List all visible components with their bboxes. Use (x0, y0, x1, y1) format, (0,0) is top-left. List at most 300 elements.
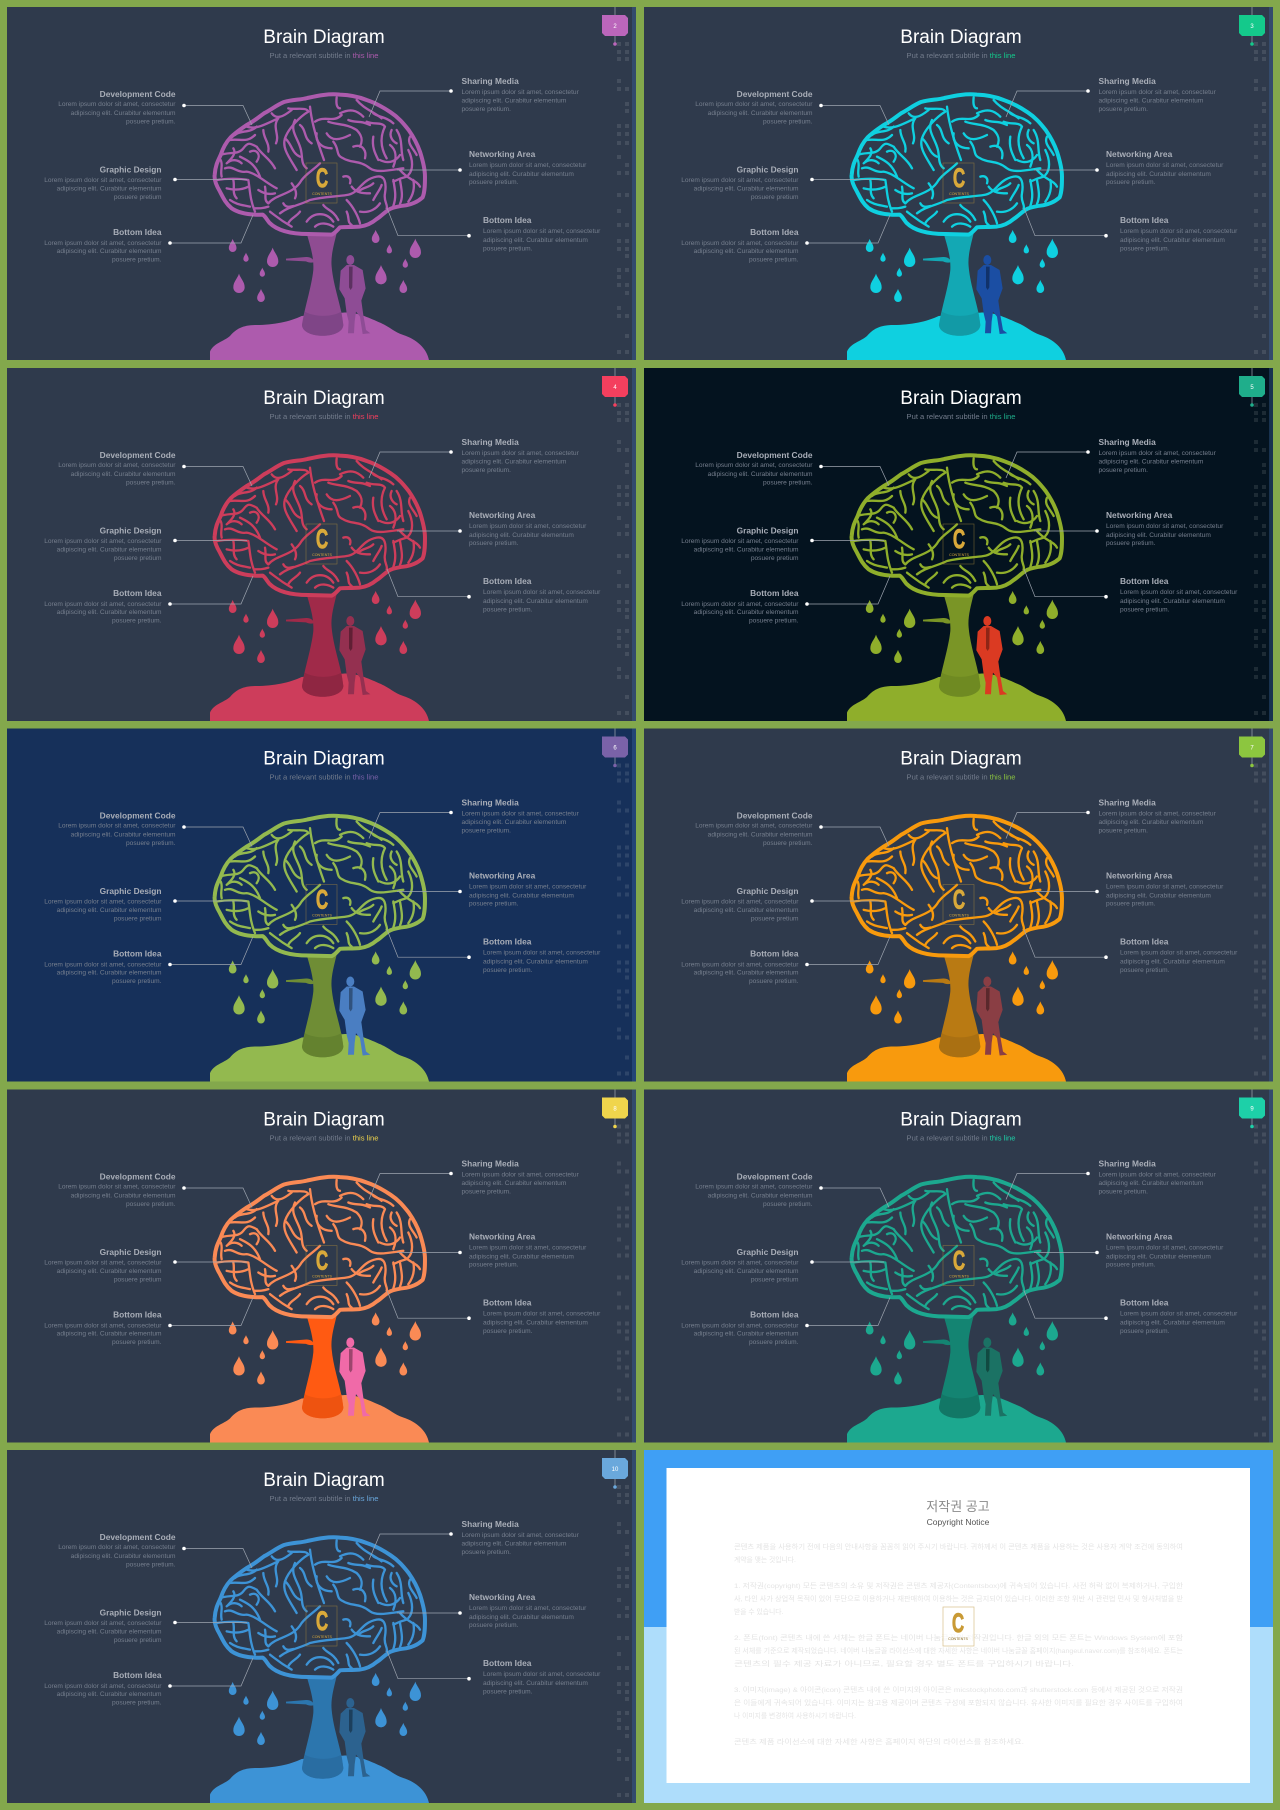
label: Graphic Design: posuere pretium (751, 194, 799, 201)
label: Sharing Media: posuere pretium. (1098, 106, 1148, 113)
label: Bottom Idea left (681, 1310, 799, 1346)
label: Development Code (58, 1172, 176, 1208)
label: Bottom Idea left: Lorem ipsum dolor sit amet, consectetur (44, 962, 162, 968)
panel: slide 4 red (7, 368, 636, 721)
label: Bottom Idea right (483, 936, 601, 974)
label: Bottom Idea right (1120, 576, 1238, 614)
label: Graphic Design: Lorem ipsum dolor sit amet, consectetur (44, 538, 162, 545)
label: Bottom Idea right: Lorem ipsum dolor sit amet, consectetur (1120, 589, 1238, 596)
label: Bottom Idea right: Lorem ipsum dolor sit amet, consectetur (483, 1310, 601, 1318)
panel: slide 3 cyan (644, 7, 1273, 360)
label: Bottom Idea right: Lorem ipsum dolor sit amet, consectetur (483, 589, 601, 596)
label: Sharing Media: Sharing Media (1098, 1158, 1156, 1168)
subtitle: Put a relevant subtitle in this line (907, 51, 1015, 60)
label: Bottom Idea left: posuere pretium. (112, 978, 162, 985)
label: Graphic Design: adipiscing elit. Curabitur elementum (694, 907, 799, 914)
label: Bottom Idea right (1120, 215, 1238, 253)
title: Brain Diagram (900, 748, 1022, 770)
page tag (602, 1450, 628, 1489)
label: Development Code: Development Code (737, 89, 813, 99)
label: Bottom Idea right: adipiscing elit. Curabitur elementum (1120, 598, 1225, 605)
label: Bottom Idea right: Lorem ipsum dolor sit amet, consectetur (1120, 228, 1238, 235)
label: Sharing Media (462, 1158, 580, 1196)
label: Sharing Media (1098, 1158, 1217, 1196)
label: Bottom Idea right (483, 1298, 601, 1335)
label: Networking Area: adipiscing elit. Curabitur elementum (469, 532, 574, 539)
label: Development Code: adipiscing elit. Curabitur elementum (71, 471, 176, 478)
label: Bottom Idea left (44, 948, 162, 985)
label: Networking Area: adipiscing elit. Curabitur elementum (469, 1254, 574, 1260)
label: Bottom Idea left: adipiscing elit. Curabitur elementum (57, 1330, 162, 1338)
label: Development Code: adipiscing elit. Curabitur elementum (71, 832, 176, 838)
label: Bottom Idea right: adipiscing elit. Curabitur elementum (483, 1680, 588, 1687)
logo: C (953, 163, 965, 193)
label: Bottom Idea left: Bottom Idea (750, 948, 799, 958)
notice body text: 3. 이미지(image) & 아이콘(icon) 콘텐츠 내에 쓴 이미지와 아이콘은 micstockphoto.com과 shutterstock.com 등에서 제공된 것으로 저작권 (734, 1685, 1183, 1694)
label: Development Code: Lorem ipsum dolor sit amet, consectetur (58, 822, 176, 830)
notice body text: 계약을 맺는 것입니다. (734, 1555, 796, 1564)
logo: C (316, 524, 328, 554)
label: Networking Area: Lorem ipsum dolor sit amet, consectetur (469, 1605, 587, 1612)
logo: C (953, 884, 965, 915)
page tag: 5 (1250, 385, 1254, 391)
label: Graphic Design: posuere pretium (114, 1637, 162, 1644)
label: Graphic Design (44, 1247, 162, 1284)
label: Networking Area: Networking Area (469, 1592, 536, 1602)
notice body text: 된 서체를 기준으로 제작되었습니다. 네이버 나눔글꼴 라이선스에 대한 자세한 사항은 네이버 나눔글꼴 홈페이지(hangeul.naver.com)를 참조하세요. 폰트는 (734, 1646, 1183, 1655)
label: Development Code: Development Code (737, 810, 813, 820)
page tag (602, 7, 628, 46)
title: Brain Diagram (900, 27, 1022, 48)
page tag (602, 368, 628, 407)
label: Bottom Idea right: Lorem ipsum dolor sit amet, consectetur (483, 228, 601, 235)
label: Graphic Design: adipiscing elit. Curabitur elementum (57, 547, 162, 554)
notice body text: 콘텐츠 제품 라이선스에 대한 자세한 사항은 홈페이지 하단의 라이선스를 참조하세요. (734, 1737, 1024, 1746)
label: Networking Area (1106, 510, 1224, 547)
label: Graphic Design (681, 886, 799, 922)
logo (306, 1606, 337, 1646)
label: Development Code: Lorem ipsum dolor sit amet, consectetur (58, 462, 176, 469)
label: Bottom Idea left: Bottom Idea (750, 588, 799, 598)
title: Brain Diagram (263, 1470, 385, 1491)
label: Development Code: adipiscing elit. Curabitur elementum (71, 1192, 176, 1200)
logo: C (316, 884, 328, 915)
connector lines (805, 450, 1108, 606)
label: Bottom Idea left: Bottom Idea (113, 588, 162, 598)
label: Graphic Design: Graphic Design (100, 886, 162, 896)
label: Bottom Idea right (483, 215, 601, 253)
label: Networking Area: posuere pretium. (469, 1622, 519, 1629)
title: Brain Diagram (900, 388, 1022, 409)
page tag: 3 (1250, 24, 1254, 30)
panel: slide 10 blue (7, 1450, 636, 1803)
panel: slide 7 orange (644, 728, 1273, 1082)
subtitle: Put a relevant subtitle in this line (270, 1494, 378, 1503)
panel: slide 8 coral (7, 1090, 636, 1442)
label: Sharing Media (1098, 76, 1217, 113)
label: Networking Area: posuere pretium. (469, 540, 519, 547)
label: Development Code: Development Code (100, 89, 176, 99)
label: Graphic Design (44, 165, 162, 201)
subtitle: Put a relevant subtitle in this line (907, 1134, 1015, 1142)
label: Networking Area: posuere pretium. (1106, 179, 1156, 186)
label: Development Code: posuere pretium. (763, 118, 813, 126)
logo: CONTENTS (312, 1635, 332, 1639)
label: Networking Area: Networking Area (469, 870, 536, 880)
label: Graphic Design (44, 526, 162, 562)
logo: C (316, 1606, 328, 1636)
page tag: 2 (613, 24, 617, 30)
label: Graphic Design: adipiscing elit. Curabitur elementum (694, 186, 799, 193)
page tag: 10 (612, 1467, 619, 1473)
label: Sharing Media (462, 76, 580, 113)
notice body text: 콘텐츠 제품을 사용하기 전에 다음의 안내사항을 꼼꼼히 읽어 주시기 바랍니다. 귀하께서 이 콘텐츠 제품을 사용하는 것은 사용자 계약 조건에 동의하여 (734, 1542, 1183, 1551)
label: Development Code (695, 1172, 813, 1208)
label: Bottom Idea left (44, 1310, 162, 1346)
label: Development Code: Development Code (737, 1172, 813, 1182)
title: Brain Diagram (900, 1110, 1022, 1130)
label: Bottom Idea left: adipiscing elit. Curabitur elementum (57, 248, 162, 255)
subtitle: Put a relevant subtitle in this line (270, 51, 378, 60)
label: Bottom Idea right: posuere pretium. (1120, 246, 1170, 253)
label: Networking Area: Networking Area (469, 510, 536, 520)
connector lines (168, 1172, 471, 1327)
label: Sharing Media (1098, 798, 1217, 834)
label: Development Code: posuere pretium. (126, 840, 176, 847)
label: Networking Area: adipiscing elit. Curabitur elementum (1106, 171, 1211, 178)
label: Sharing Media: Lorem ipsum dolor sit amet, consectetur (1098, 810, 1217, 818)
label: Bottom Idea left: Lorem ipsum dolor sit amet, consectetur (681, 601, 799, 608)
label: Bottom Idea right: Bottom Idea (483, 936, 532, 946)
label: Networking Area: Networking Area (1106, 1232, 1173, 1242)
label: Graphic Design: adipiscing elit. Curabitur elementum (57, 186, 162, 193)
connector lines (168, 811, 471, 966)
panel: copyright notice (644, 1450, 1273, 1803)
logo: C (316, 1245, 328, 1276)
connector lines (168, 1532, 471, 1688)
label: Graphic Design: Graphic Design (737, 526, 798, 536)
label: Development Code: adipiscing elit. Curabitur elementum (71, 1553, 176, 1560)
label: Sharing Media (1098, 437, 1217, 474)
page tag: 6 (613, 746, 617, 752)
label: Networking Area: adipiscing elit. Curabitur elementum (1106, 1254, 1211, 1260)
subtitle: Put a relevant subtitle in this line (270, 1134, 378, 1142)
label: Networking Area: Lorem ipsum dolor sit amet, consectetur (469, 884, 587, 890)
label: Bottom Idea right: posuere pretium. (483, 246, 533, 253)
notice body text: 은 이들에게 귀속되어 있습니다. 이미지는 참고용 제공이며 콘텐츠 구성에 포함되지 않습니다. 유사한 이미지를 필요한 경우 사이트를 구입하여 (734, 1698, 1183, 1707)
label: Networking Area (469, 870, 587, 908)
connector lines (805, 89, 1108, 245)
label: Development Code: Development Code (100, 1172, 176, 1182)
logo: C (953, 1245, 965, 1276)
label: Bottom Idea right: adipiscing elit. Curabitur elementum (483, 598, 588, 605)
label: Development Code: Lorem ipsum dolor sit amet, consectetur (58, 101, 176, 108)
label: Bottom Idea left (44, 1670, 162, 1706)
label: Development Code: adipiscing elit. Curabitur elementum (708, 471, 813, 478)
label: Sharing Media: adipiscing elit. Curabitur elementum (1098, 819, 1204, 826)
label: Bottom Idea right: Bottom Idea (1120, 936, 1169, 946)
label: Bottom Idea right: Bottom Idea (1120, 576, 1169, 586)
label: Bottom Idea left: Lorem ipsum dolor sit amet, consectetur (44, 1322, 162, 1330)
label: Sharing Media: adipiscing elit. Curabitur elementum (462, 819, 567, 826)
label: Bottom Idea right: posuere pretium. (1120, 967, 1170, 974)
label: Sharing Media: Lorem ipsum dolor sit amet, consectetur (1098, 1172, 1217, 1178)
page tag: 7 (1250, 746, 1254, 752)
label: Bottom Idea left: Lorem ipsum dolor sit amet, consectetur (44, 601, 162, 608)
label: Bottom Idea right: adipiscing elit. Curabitur elementum (483, 237, 588, 244)
page tag: 8 (613, 1106, 617, 1112)
label: Bottom Idea right: adipiscing elit. Curabitur elementum (483, 1320, 588, 1326)
label: Bottom Idea right (1120, 1298, 1238, 1335)
page tag (1239, 368, 1265, 407)
label: Graphic Design: Graphic Design (100, 1247, 162, 1257)
label: Development Code: posuere pretium. (126, 480, 176, 486)
label: Development Code: adipiscing elit. Curabitur elementum (71, 110, 176, 117)
label: Sharing Media: adipiscing elit. Curabitur elementum (462, 1180, 567, 1187)
label: Bottom Idea right: posuere pretium. (483, 1689, 533, 1696)
logo: CONTENTS (949, 192, 969, 196)
label: Bottom Idea right: posuere pretium. (483, 967, 533, 974)
page tag (1239, 1090, 1265, 1128)
label: Development Code (58, 89, 176, 126)
label: Graphic Design (681, 526, 799, 562)
label: Graphic Design: Lorem ipsum dolor sit amet, consectetur (44, 898, 162, 906)
label: Bottom Idea right: Lorem ipsum dolor sit amet, consectetur (1120, 950, 1238, 956)
label: Networking Area: posuere pretium. (469, 1262, 519, 1268)
notice body text: 2. 폰트(font) 콘텐츠 내에 쓴 서체는 한글 폰트는 네이버 나눔글꼴의 저작권입니다. 한글 외의 모든 폰트는 Windows System에 포함 (734, 1633, 1183, 1642)
label: Bottom Idea left: Lorem ipsum dolor sit amet, consectetur (44, 240, 162, 247)
label: Networking Area: posuere pretium. (1106, 900, 1156, 908)
label: Networking Area: adipiscing elit. Curabitur elementum (469, 1614, 574, 1621)
label: Sharing Media: Lorem ipsum dolor sit amet, consectetur (1098, 450, 1217, 457)
label: Networking Area: posuere pretium. (469, 179, 519, 186)
logo (943, 163, 974, 203)
label: Development Code: Lorem ipsum dolor sit amet, consectetur (695, 462, 813, 469)
label: Bottom Idea left: adipiscing elit. Curabitur elementum (694, 970, 799, 976)
page tag (602, 1090, 628, 1128)
label: Graphic Design: Graphic Design (100, 526, 162, 536)
label: Sharing Media: adipiscing elit. Curabitur elementum (462, 459, 567, 466)
label: Development Code (58, 1532, 176, 1568)
label: Development Code: Development Code (100, 810, 176, 820)
white notice card (666, 1468, 1250, 1783)
label: Development Code: posuere pretium. (763, 480, 813, 486)
logo (943, 1607, 974, 1646)
panel: slide 2 purple (7, 7, 636, 360)
label: Bottom Idea left: Lorem ipsum dolor sit amet, consectetur (681, 1322, 799, 1330)
label: Networking Area: Networking Area (1106, 870, 1173, 880)
label: Bottom Idea right: adipiscing elit. Curabitur elementum (483, 958, 588, 966)
label: Graphic Design: posuere pretium (114, 555, 162, 562)
panel: slide 9 teal (644, 1090, 1273, 1442)
notice title: 저작권 공고 (926, 1499, 990, 1514)
label: Graphic Design: Graphic Design (737, 1247, 798, 1257)
label: Bottom Idea left: posuere pretium. (112, 1700, 162, 1706)
label: Sharing Media: Lorem ipsum dolor sit amet, consectetur (462, 1532, 580, 1539)
label: Graphic Design: posuere pretium (114, 916, 162, 922)
label: Bottom Idea left: Bottom Idea (113, 948, 162, 958)
label: Sharing Media: adipiscing elit. Curabitur elementum (1098, 98, 1204, 105)
label: Bottom Idea left: Lorem ipsum dolor sit amet, consectetur (681, 962, 799, 968)
label: Graphic Design: posuere pretium (751, 555, 799, 562)
logo: C (953, 524, 965, 554)
label: Sharing Media: posuere pretium. (462, 1549, 511, 1556)
label: Graphic Design: adipiscing elit. Curabitur elementum (57, 907, 162, 914)
label: Development Code: Development Code (100, 450, 176, 460)
label: Graphic Design: Lorem ipsum dolor sit amet, consectetur (681, 1260, 799, 1266)
label: Bottom Idea left (44, 227, 162, 264)
label: Sharing Media: Sharing Media (462, 437, 519, 447)
label: Sharing Media: Lorem ipsum dolor sit amet, consectetur (462, 1172, 580, 1178)
label: Graphic Design: Graphic Design (737, 165, 798, 175)
label: Graphic Design: Lorem ipsum dolor sit amet, consectetur (44, 1260, 162, 1266)
label: Development Code: Lorem ipsum dolor sit amet, consectetur (695, 101, 813, 108)
logo: CONTENTS (948, 1637, 968, 1641)
label: Bottom Idea right (1120, 936, 1238, 974)
label: Development Code (58, 450, 176, 486)
logo: CONTENTS (949, 914, 969, 918)
label: Bottom Idea left: posuere pretium. (749, 1339, 799, 1346)
logo (943, 884, 974, 924)
label: Networking Area (1106, 870, 1224, 908)
page tag (1239, 728, 1265, 767)
logo (306, 524, 337, 564)
label: Networking Area (469, 510, 587, 547)
label: Sharing Media (462, 798, 580, 834)
label: Bottom Idea left: Lorem ipsum dolor sit amet, consectetur (44, 1683, 162, 1690)
label: Bottom Idea right: Lorem ipsum dolor sit amet, consectetur (1120, 1310, 1238, 1318)
label: Development Code: posuere pretium. (126, 118, 176, 126)
label: Networking Area (469, 1232, 587, 1268)
label: Sharing Media: posuere pretium. (462, 1188, 511, 1196)
label: Development Code: Lorem ipsum dolor sit amet, consectetur (695, 822, 813, 830)
label: Bottom Idea right: adipiscing elit. Curabitur elementum (1120, 1320, 1225, 1326)
label: Bottom Idea right: Bottom Idea (483, 576, 532, 586)
label: Bottom Idea left: posuere pretium. (749, 618, 799, 624)
label: Development Code: posuere pretium. (763, 1201, 813, 1208)
label: Bottom Idea left: Bottom Idea (113, 227, 162, 237)
label: Networking Area: adipiscing elit. Curabitur elementum (1106, 892, 1211, 900)
connector lines (168, 89, 471, 245)
logo (306, 884, 337, 924)
label: Sharing Media: Sharing Media (462, 76, 519, 86)
connector lines (805, 811, 1108, 966)
label: Bottom Idea right: Bottom Idea (483, 215, 532, 225)
connector lines (805, 1172, 1108, 1327)
label: Sharing Media: Sharing Media (462, 1158, 519, 1168)
label: Networking Area: adipiscing elit. Curabitur elementum (1106, 532, 1211, 539)
label: Graphic Design: Graphic Design (100, 1608, 162, 1618)
label: Sharing Media (462, 1519, 580, 1556)
page tag (1239, 7, 1265, 46)
logo: C (952, 1608, 964, 1638)
label: Networking Area: Networking Area (469, 149, 536, 159)
title: Brain Diagram (263, 748, 385, 770)
label: Graphic Design: Graphic Design (737, 886, 798, 896)
notice body text: 콘텐츠의 필수 제공 자료가 아니므로, 필요할 경우 별도 폰트를 구입하시기 바랍니다. (734, 1659, 1074, 1668)
label: Sharing Media: Sharing Media (1098, 798, 1156, 808)
label: Graphic Design: Lorem ipsum dolor sit amet, consectetur (681, 177, 799, 184)
label: Bottom Idea right: Lorem ipsum dolor sit amet, consectetur (483, 950, 601, 956)
label: Bottom Idea left: posuere pretium. (749, 256, 799, 264)
label: Graphic Design: adipiscing elit. Curabitur elementum (57, 1629, 162, 1636)
label: Bottom Idea left: Bottom Idea (750, 1310, 799, 1320)
label: Bottom Idea right: adipiscing elit. Curabitur elementum (1120, 237, 1225, 244)
notice subtitle: Copyright Notice (927, 1517, 990, 1527)
logo: CONTENTS (949, 1274, 969, 1278)
label: Graphic Design: Lorem ipsum dolor sit amet, consectetur (44, 177, 162, 184)
notice body text: 1. 저작권(copyright) 모든 콘텐츠의 소유 및 저작권은 콘텐츠 제공자(Contentsbox)에 귀속되어 있습니다. 사전 허락 없이 복제하거나, 구입한 (734, 1581, 1183, 1590)
label: Sharing Media: Lorem ipsum dolor sit amet, consectetur (462, 810, 580, 818)
label: Bottom Idea left: adipiscing elit. Curabitur elementum (694, 609, 799, 616)
label: Graphic Design: adipiscing elit. Curabitur elementum (694, 547, 799, 554)
label: Bottom Idea left: adipiscing elit. Curabitur elementum (694, 248, 799, 255)
label: Networking Area: adipiscing elit. Curabitur elementum (469, 171, 574, 178)
label: Graphic Design: posuere pretium (751, 1276, 799, 1284)
label: Bottom Idea left: Bottom Idea (750, 227, 799, 237)
label: Bottom Idea right: posuere pretium. (483, 1328, 533, 1335)
label: Graphic Design: Graphic Design (100, 165, 162, 175)
label: Networking Area (469, 149, 587, 186)
label: Bottom Idea left: adipiscing elit. Curabitur elementum (57, 1691, 162, 1698)
label: Bottom Idea right (483, 576, 601, 614)
notice body text: 받을 수 있습니다. (734, 1607, 784, 1616)
logo: CONTENTS (312, 914, 332, 918)
title: Brain Diagram (263, 388, 385, 409)
logo (943, 524, 974, 564)
label: Sharing Media: Sharing Media (1098, 76, 1156, 86)
label: Networking Area: Networking Area (469, 1232, 536, 1242)
label: Development Code (695, 810, 813, 847)
label: Graphic Design (681, 165, 799, 201)
label: Bottom Idea right: posuere pretium. (1120, 607, 1170, 614)
label: Bottom Idea left: adipiscing elit. Curabitur elementum (694, 1330, 799, 1338)
label: Graphic Design: adipiscing elit. Curabitur elementum (57, 1268, 162, 1275)
label: Sharing Media: posuere pretium. (1098, 828, 1148, 834)
label: Development Code: Development Code (737, 450, 813, 460)
label: Networking Area: adipiscing elit. Curabitur elementum (469, 892, 574, 900)
label: Sharing Media: Sharing Media (462, 798, 519, 808)
label: Development Code: adipiscing elit. Curabitur elementum (708, 110, 813, 117)
label: Bottom Idea right: posuere pretium. (483, 607, 533, 614)
label: Development Code (695, 89, 813, 126)
connector lines (168, 450, 471, 606)
label: Bottom Idea left: posuere pretium. (112, 1339, 162, 1346)
label: Bottom Idea left: Bottom Idea (113, 1310, 162, 1320)
label: Graphic Design: Lorem ipsum dolor sit amet, consectetur (681, 898, 799, 906)
label: Development Code: adipiscing elit. Curabitur elementum (708, 832, 813, 838)
label: Graphic Design: posuere pretium (114, 194, 162, 201)
label: Graphic Design (681, 1247, 799, 1284)
label: Sharing Media: posuere pretium. (462, 467, 511, 474)
label: Networking Area: posuere pretium. (469, 900, 519, 908)
label: Sharing Media: posuere pretium. (1098, 467, 1148, 474)
page tag: 4 (613, 385, 617, 391)
label: Development Code: Lorem ipsum dolor sit amet, consectetur (58, 1544, 176, 1551)
label: Bottom Idea left: Bottom Idea (113, 1670, 162, 1680)
label: Development Code: posuere pretium. (126, 1201, 176, 1208)
label: Networking Area (469, 1592, 587, 1629)
page tag (602, 728, 628, 767)
label: Networking Area: Lorem ipsum dolor sit amet, consectetur (469, 1244, 587, 1252)
label: Networking Area: Lorem ipsum dolor sit amet, consectetur (1106, 523, 1224, 530)
label: Graphic Design: Lorem ipsum dolor sit amet, consectetur (44, 1620, 162, 1627)
notice body text: 나 이미지를 변경하여 사용하시기 바랍니다. (734, 1711, 856, 1720)
label: Networking Area: Lorem ipsum dolor sit amet, consectetur (469, 523, 587, 530)
logo (943, 1245, 974, 1286)
label: Networking Area: Networking Area (1106, 510, 1173, 520)
label: Bottom Idea left (681, 948, 799, 985)
